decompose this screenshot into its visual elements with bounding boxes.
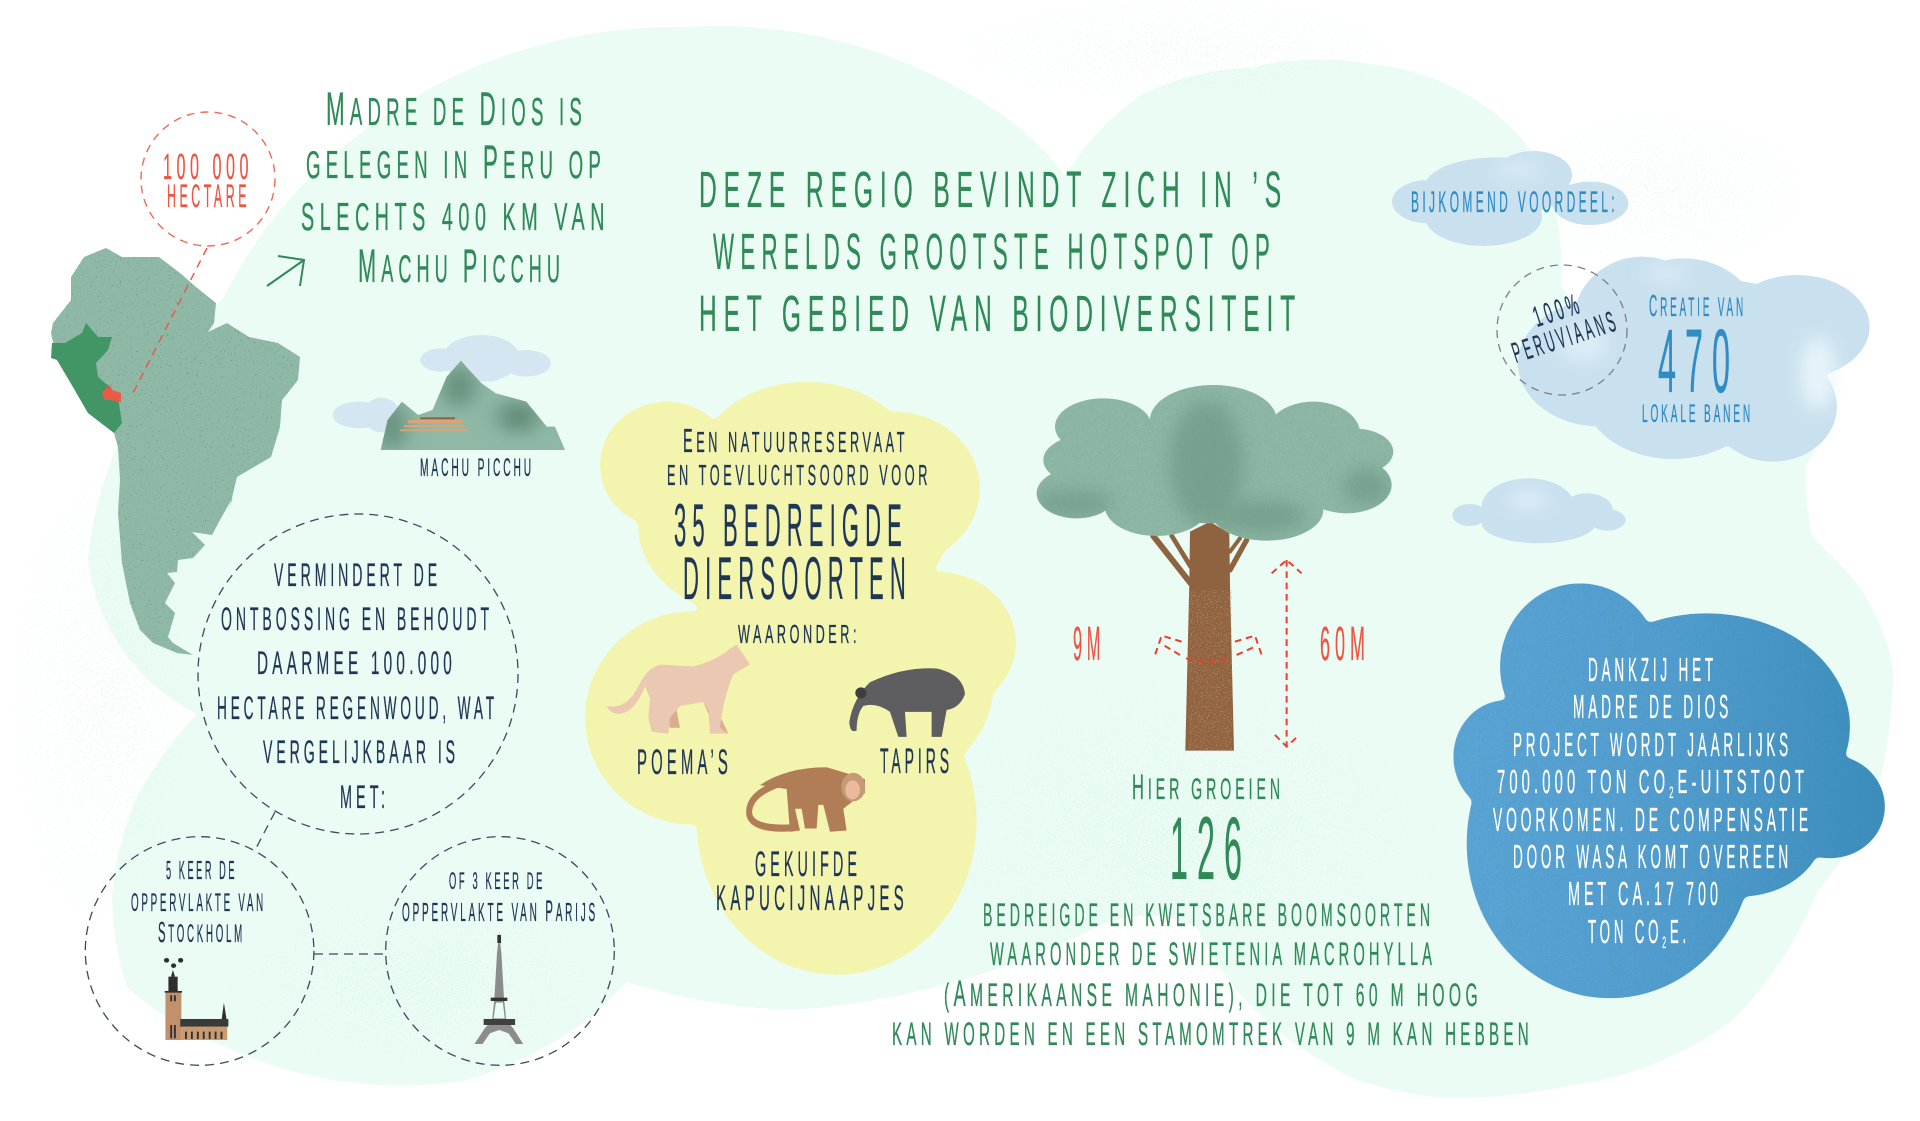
cloud: 470 local jobs: CREATIE VAN	[1649, 288, 1746, 323]
icon: puma	[607, 645, 750, 734]
panel: Paris circle: OF 3 KEER DE	[449, 868, 545, 895]
icon: Machu Picchu	[333, 335, 565, 450]
connector: Stockholm to Paris	[314, 953, 385, 955]
panel: blue CO2 blob: MET CA.17 700	[1568, 875, 1722, 912]
panel: blue CO2 blob: 2	[1662, 933, 1670, 952]
100 000 hectare callout	[133, 112, 275, 393]
text: reserve intro	[667, 422, 931, 492]
trunk speckle	[1189, 590, 1232, 750]
icon: tapir	[849, 668, 965, 737]
label: capuchins	[716, 845, 908, 918]
panel: blue CO2 blob: TON CO	[1588, 913, 1771, 950]
panel: Stockholm circle	[85, 837, 314, 1065]
text: MACHU PICCHU	[420, 454, 534, 482]
map: South America	[40, 240, 310, 660]
panel: animals: KAPUCIJNAAPJES	[716, 879, 908, 918]
panel: blue CO2 blob: DANKZIJ HET	[1588, 651, 1717, 688]
text: 35 species	[674, 492, 912, 612]
panel: animals: EN TOEVLUCHTSOORD VOOR	[667, 460, 931, 492]
text: 126	[1170, 798, 1251, 898]
yellow blob	[585, 382, 1016, 975]
connector: main circle to Stockholm	[254, 812, 275, 852]
panel: Paris circle	[386, 837, 614, 1065]
heading: Madre de Dios location	[301, 82, 610, 292]
panel: deforestation circle: DAARMEE 100.000	[257, 645, 456, 681]
text: HET GEBIED VAN BIODIVERSITEIT	[699, 285, 1302, 342]
panel: animals: WAARONDER:	[738, 619, 860, 649]
panel: Paris circle: OPPERVLAKTE VAN PARIJS	[402, 895, 598, 928]
panel: blue CO2 blob: 2	[1669, 783, 1678, 802]
heading: Madre de Dios location: GELEGEN IN PERU OP	[306, 135, 606, 188]
map: Madre de Dios region	[102, 385, 121, 402]
100 000 hectare callout: HECTARE	[167, 178, 250, 214]
panel: deforestation circle: VERGELIJKBAAR IS	[263, 734, 459, 770]
panel: deforestation circle	[198, 514, 518, 834]
panel: Stockholm circle: OPPERVLAKTE VAN	[131, 889, 266, 917]
text: BIJKOMEND VOORDEEL:	[1411, 186, 1618, 219]
panel: animals	[585, 382, 1016, 975]
panel: deforestation circle: VERMINDERT DE	[274, 557, 441, 593]
text: HECTARE REGENWOUD, WAT	[217, 690, 498, 726]
tree branches	[1153, 536, 1247, 583]
panel: animals: POEMA’S	[637, 743, 732, 782]
panel: animals: 35 BEDREIGDE	[674, 492, 908, 559]
icon: Eiffel tower	[474, 933, 523, 1044]
panel: blue CO2 blob	[1454, 584, 1885, 998]
panel: deforestation circle: MET:	[340, 779, 389, 815]
panel: animals: TAPIRS	[880, 742, 953, 781]
cloud: 470 local jobs: 470	[1658, 312, 1739, 412]
measure: height 60 m	[1272, 560, 1302, 747]
panel: Stockholm circle: 5 KEER DE	[166, 855, 237, 885]
panel: animals: EEN NATUURRESERVAAT	[683, 422, 908, 459]
heading: Madre de Dios location: MADRE DE DIOS IS	[326, 82, 587, 135]
text: PERUVIAANS	[1508, 305, 1623, 370]
measure: trunk girth 9 m	[1155, 636, 1262, 662]
title	[699, 161, 1302, 342]
panel: Stockholm circle: STOCKHOLM	[158, 917, 245, 949]
icon: capuchin monkey	[749, 767, 865, 832]
panel: animals: DIERSOORTEN	[683, 545, 912, 612]
text: 60M	[1320, 618, 1370, 671]
cloud: 470 local jobs: LOKALE BANEN	[1642, 400, 1753, 428]
text: 9M	[1073, 618, 1105, 671]
tree crown	[1033, 383, 1397, 543]
text: DEZE REGIO BEVINDT ZICH IN ’S	[699, 161, 1288, 218]
panel: blue CO2 blob: E.	[1670, 913, 1690, 950]
text: ONTBOSSING EN BEHOUDT	[221, 601, 493, 637]
text: HIER GROEIEN	[1132, 768, 1284, 807]
100 000 hectare callout: 100 000	[163, 146, 253, 187]
badge: 100% Peruvian: 100%	[1529, 288, 1587, 334]
icon: arrow	[267, 256, 304, 286]
cloud: small decorative	[1452, 478, 1625, 543]
label: capuchins: GEKUIFDE	[755, 845, 861, 884]
cloud: 470 local jobs	[1518, 257, 1870, 462]
heading: Madre de Dios location: SLECHTS 400 KM VAN	[301, 196, 610, 239]
map: Peru	[51, 323, 122, 433]
badge: 100% Peruvian	[1497, 265, 1627, 395]
text: tree species	[892, 897, 1533, 1052]
icon: tree	[1033, 383, 1397, 751]
heading: Madre de Dios location: MACHU PICCHU	[358, 239, 565, 292]
panel: blue CO2 blob: 700.000 TON CO	[1497, 763, 1882, 800]
tree trunk	[1185, 522, 1234, 751]
icon: Stockholm city hall	[164, 958, 228, 1040]
cloud: bijkomend voordeel	[1392, 151, 1628, 246]
